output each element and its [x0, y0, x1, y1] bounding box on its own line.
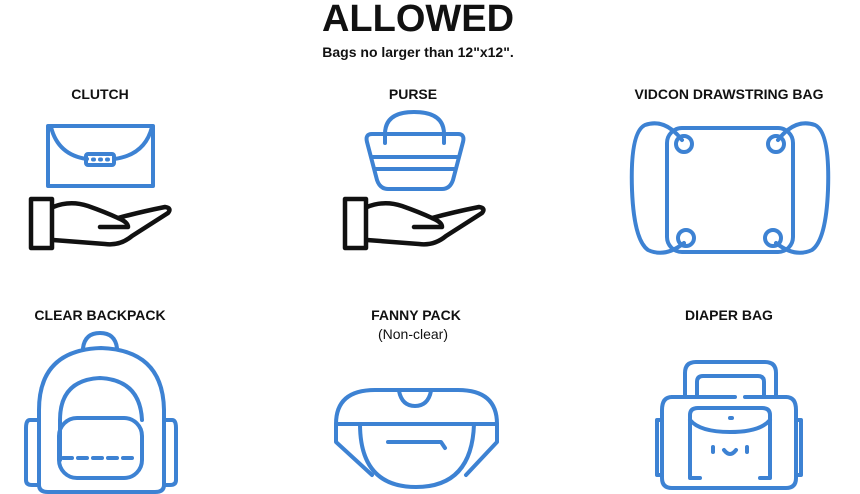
icon: hand under clutch — [31, 199, 169, 248]
label: fanny pack: FANNY PACK — [371, 307, 461, 323]
icon: fanny pack — [336, 390, 497, 487]
label: clutch: CLUTCH — [71, 86, 129, 102]
icon: drawstring bag — [632, 123, 828, 253]
subtitle: Bags no larger than 12"x12". — [322, 44, 514, 60]
label: diaper bag: DIAPER BAG — [685, 307, 773, 323]
icon: purse — [367, 112, 463, 189]
icon: hand under purse — [345, 199, 483, 248]
label: purse: PURSE — [389, 86, 437, 102]
label: clear backpack: CLEAR BACKPACK — [34, 307, 166, 323]
icon: clear backpack — [26, 333, 176, 492]
icon: clutch — [48, 126, 153, 186]
icon: diaper bag — [657, 362, 801, 488]
note: non-clear: (Non-clear) — [378, 326, 448, 342]
label: drawstring: VIDCON DRAWSTRING BAG — [634, 86, 824, 102]
